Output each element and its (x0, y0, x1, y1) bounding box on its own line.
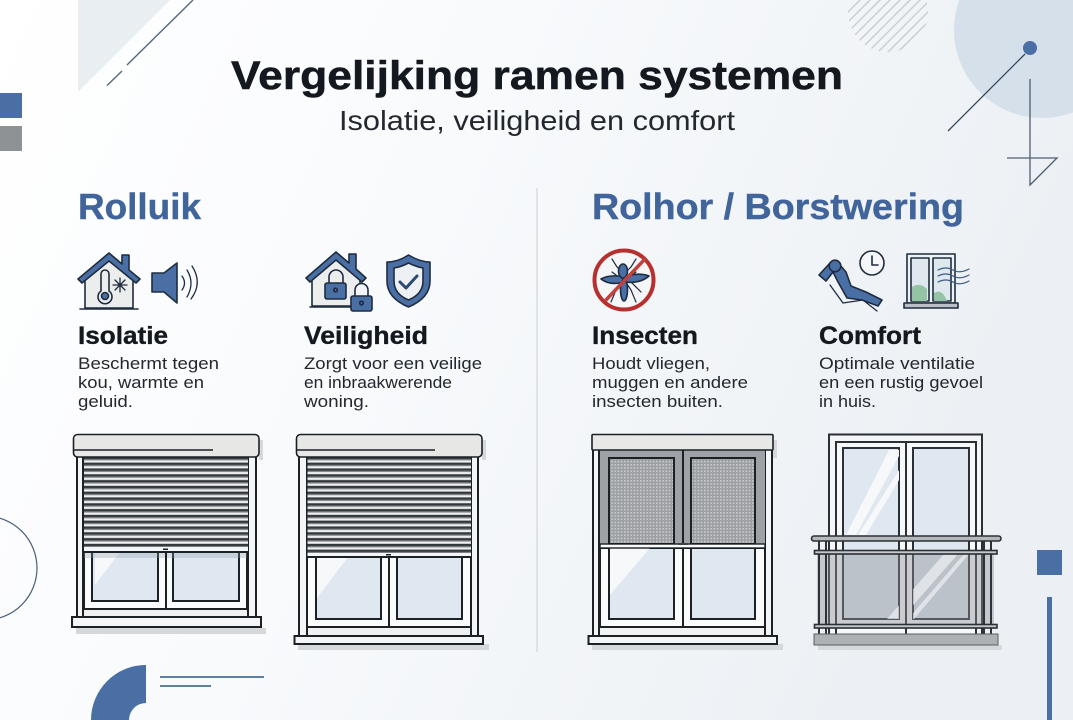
subtitle: Isolatie, veiligheid en comfort (339, 105, 735, 136)
window: rolluik 1 (72, 434, 266, 634)
text block: Veiligheid: Veiligheid (304, 322, 428, 350)
heading: Rolluik: Rolluik (78, 186, 202, 227)
text block: Comfort: in huis. (819, 392, 876, 411)
window: rolhor (588, 434, 783, 650)
text block: Isolatie: Isolatie (78, 322, 168, 350)
text block: Insecten: Insecten (592, 322, 698, 350)
icon: no mosquito (594, 250, 654, 310)
text block: Comfort: Optimale ventilatie (819, 354, 975, 373)
divider (536, 188, 538, 652)
text block: Insecten: Houdt vliegen, (592, 354, 710, 373)
text block: Insecten: insecten buiten. (592, 392, 723, 411)
title: Vergelijking ramen systemen (231, 54, 843, 98)
heading: Rolhor / Borstwering: Rolhor / Borstwering (592, 186, 964, 227)
text block: Veiligheid: en inbraakwerende (304, 373, 452, 392)
window: french balcony (812, 434, 1002, 650)
text block: Isolatie: kou, warmte en (78, 373, 204, 392)
text block: Isolatie (78, 322, 219, 411)
decoration: hatched circle (848, 0, 928, 52)
text block: Isolatie: geluid. (78, 392, 133, 411)
text block: Veiligheid: Zorgt voor een veilige (304, 354, 482, 373)
text block: Comfort: Comfort (819, 322, 922, 350)
icon: window with breeze (904, 254, 969, 308)
decoration: blue quarter ring (91, 665, 146, 720)
text block: Insecten (592, 322, 748, 411)
decoration: left outline circle (0, 516, 37, 620)
window: rolluik 2 (294, 434, 489, 650)
icon: house with thermometer and snowflake (78, 253, 140, 309)
icon: shield (387, 255, 430, 307)
icon: relaxing person with clock (819, 251, 884, 311)
icon: house with locks (306, 252, 372, 311)
text block: Veiligheid (303, 322, 482, 411)
decoration: bottom lines (160, 677, 264, 686)
decoration: top-right circle and lines (948, 0, 1073, 185)
text block: Veiligheid: woning. (303, 392, 369, 411)
text block: Comfort: en een rustig gevoel (819, 373, 983, 392)
text block: Isolatie: Beschermt tegen (78, 354, 219, 373)
text block: Comfort (819, 322, 983, 411)
icon: speaker (152, 263, 197, 303)
decoration: top-left triangle and line (78, 0, 193, 92)
text block: Insecten: muggen en andere (592, 373, 748, 392)
decoration: left squares (0, 93, 22, 151)
decoration: right square and bar (1037, 550, 1062, 720)
